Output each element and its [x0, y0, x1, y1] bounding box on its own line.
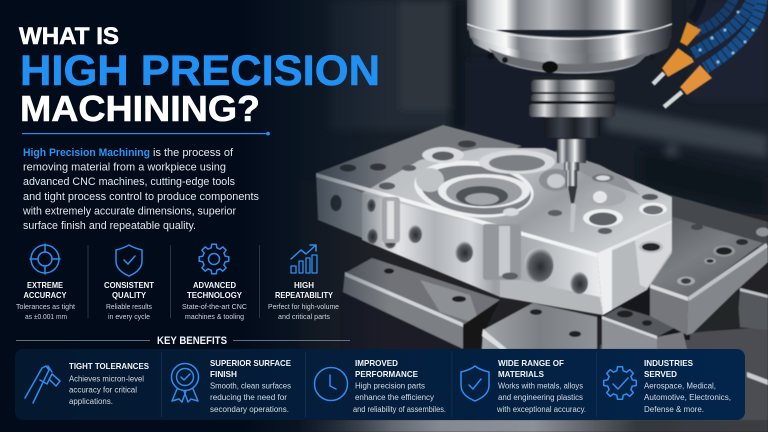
title underline with dot	[22, 132, 270, 136]
benefit: superior surface finish: SUPERIOR SURFACE	[210, 358, 291, 368]
feature: advanced technology: ADVANCED	[193, 281, 236, 290]
benefit: industries served: Defense & more.	[644, 405, 704, 414]
feature: extreme accuracy	[16, 244, 75, 321]
intro paragraph: is the process of	[153, 147, 234, 159]
benefit: wide range of materials: with exceptional accuracy.	[496, 405, 586, 414]
feature: consistent quality: QUALITY	[112, 291, 147, 300]
benefit: improved performance: PERFORMANCE	[355, 369, 418, 379]
benefit: tight tolerances	[25, 361, 149, 406]
benefit: industries served: Automotive, Electronics,	[644, 393, 731, 402]
intro paragraph: removing material from a workpiece using	[23, 162, 226, 174]
intro paragraph: High Precision Machining	[23, 147, 150, 159]
benefit: wide range of materials: Works with metals, alloys	[498, 382, 583, 390]
lower right plate	[602, 307, 680, 337]
panel: key benefits	[15, 349, 745, 420]
machine table and fixture plates	[300, 180, 768, 432]
title: HIGH PRECISION	[20, 47, 380, 95]
middle plate	[482, 303, 597, 349]
benefit: tight tolerances: applications.	[69, 397, 113, 406]
floor below panel	[300, 420, 768, 432]
benefit: superior surface finish: secondary operations.	[210, 405, 289, 414]
key benefits heading: KEY BENEFITS	[157, 335, 227, 347]
icon: gear with check	[604, 367, 636, 399]
right block	[623, 217, 763, 298]
feature: high repeatability: and critical parts	[278, 312, 330, 321]
benefit: improved performance: and reliability of assembiles.	[353, 405, 446, 414]
benefit: industries served: SERVED	[644, 369, 677, 379]
left lower plate	[345, 258, 500, 325]
intro paragraph: surface finish and repeatable quality.	[23, 220, 196, 232]
icon: award rosette	[172, 364, 198, 402]
intro paragraph: with extremely accurate dimensions, superior	[22, 206, 236, 218]
feature: consistent quality	[104, 245, 154, 321]
feature: extreme accuracy: Tolerances as tight	[16, 302, 75, 311]
feature: extreme accuracy: ACCURACY	[24, 291, 67, 300]
icon: rising bar chart	[291, 245, 317, 273]
benefit: superior surface finish: FINISH	[210, 369, 237, 379]
left dark gradient overlay	[0, 0, 390, 432]
benefit: wide range of materials: MATERIALS	[498, 369, 544, 379]
benefit: superior surface finish	[172, 358, 291, 414]
title: MACHINING?	[20, 88, 260, 129]
benefit: improved performance: IMPROVED	[355, 358, 398, 368]
benefit: industries served: Aerospace, Medical,	[644, 382, 716, 390]
feature: extreme accuracy: EXTREME	[27, 281, 63, 290]
icon: crosshair target	[30, 244, 60, 274]
icon: shield with check	[461, 366, 489, 401]
benefit: wide range of materials: and engineering plastics	[498, 393, 583, 402]
benefit: improved performance: enhance the efficiency	[355, 393, 434, 402]
feature: consistent quality: CONSISTENT	[104, 281, 154, 290]
feature: high repeatability: HIGH	[294, 281, 314, 290]
icon: caliper	[25, 366, 60, 403]
metal workpiece	[316, 125, 672, 315]
feature: advanced technology: machines & tooling	[185, 312, 244, 321]
workpiece pockets and holes	[330, 140, 667, 294]
icon: clock	[314, 368, 348, 400]
benefit: wide range of materials: WIDE RANGE OF	[498, 358, 564, 368]
dark wedge under workpiece	[597, 285, 690, 340]
feature: extreme accuracy: as ±0.001 mm	[25, 312, 67, 321]
benefit: industries served	[604, 358, 731, 414]
benefit: superior surface finish: reducing the need for	[210, 393, 287, 402]
feature: high repeatability: Perfect for high-volume	[268, 302, 339, 311]
feature: high repeatability	[268, 245, 339, 321]
title: WHAT IS	[19, 23, 119, 50]
title	[19, 23, 380, 129]
icon: shield with check	[116, 245, 142, 276]
intro paragraph: advanced CNC machines, cutting-edge tools	[23, 176, 235, 188]
benefit: industries served: INDUSTRIES	[644, 358, 693, 368]
feature: advanced technology: TECHNOLOGY	[187, 291, 243, 300]
feature: consistent quality: Reliable results	[106, 302, 152, 311]
machine spindle and tool holder	[467, 0, 672, 232]
intro paragraph: and tight process control to produce components	[23, 191, 259, 203]
feature: advanced technology: State-of-the-art CNC	[182, 302, 247, 311]
benefit: tight tolerances: accuracy for critical	[69, 386, 137, 394]
feature: high repeatability: REPEATABILITY	[275, 291, 333, 300]
benefit: tight tolerances: Achieves micron-level	[69, 374, 144, 384]
benefit: improved performance	[314, 358, 446, 414]
feature: consistent quality: in every cycle	[108, 312, 150, 321]
benefit: improved performance: High precision parts	[355, 382, 425, 390]
intro paragraph	[22, 147, 259, 232]
icon: gear	[199, 244, 229, 274]
benefit: wide range of materials	[461, 358, 586, 414]
benefit: superior surface finish: Smooth, clean surfaces	[210, 382, 291, 390]
coolant hoses with orange nozzles	[653, 0, 762, 107]
feature: advanced technology	[182, 244, 247, 321]
benefit: tight tolerances: TIGHT TOLERANCES	[69, 361, 149, 371]
